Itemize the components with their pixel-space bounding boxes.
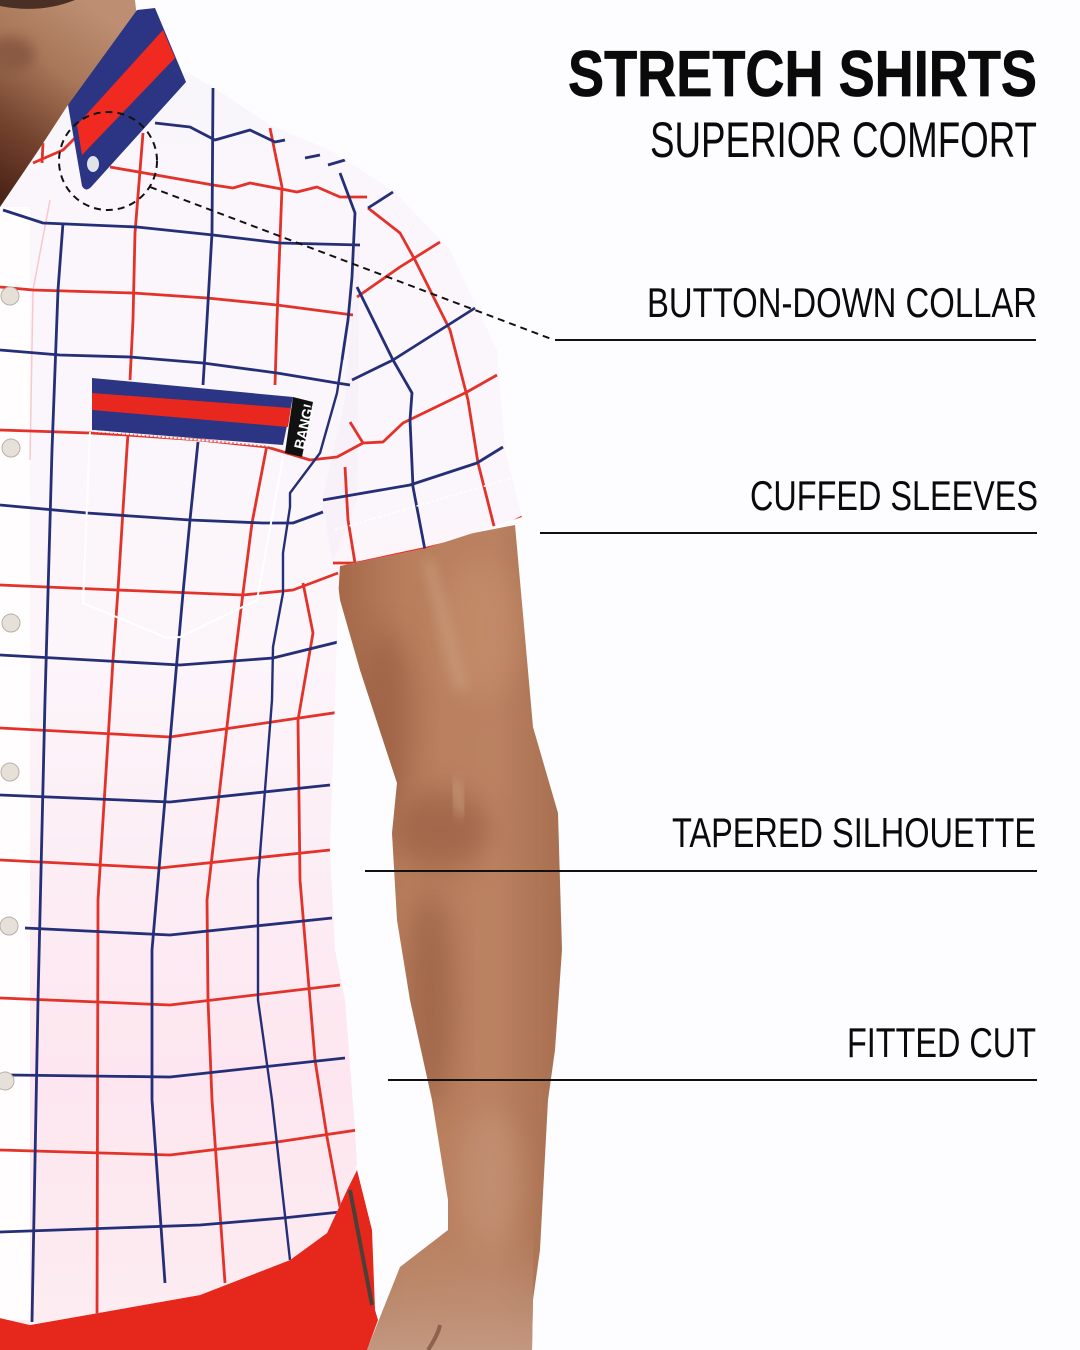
neck skin [0, 0, 138, 212]
pocket [83, 378, 318, 638]
shirt grid lines [0, 88, 522, 1322]
arm [335, 525, 562, 1350]
collar [68, 8, 186, 190]
collar callout circle and leader [59, 112, 554, 340]
placket buttons [0, 287, 20, 1090]
red shorts [0, 1170, 378, 1350]
pocket label: BANG! [291, 402, 318, 451]
shirt [0, 72, 522, 1325]
pocket label [285, 397, 318, 457]
